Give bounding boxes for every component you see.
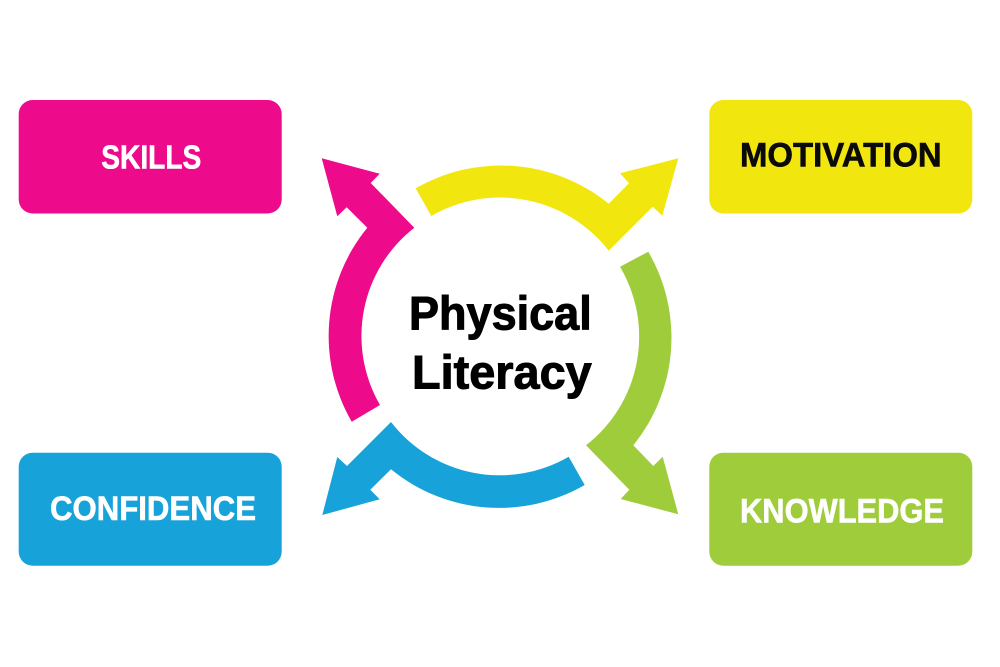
label: skills: SKILLS [101, 139, 201, 176]
panel: confidence [19, 453, 282, 566]
label: confidence: CONFIDENCE [50, 490, 256, 528]
arrow: blue toward confidence [322, 422, 585, 515]
title: physical literacy: Physical [409, 286, 592, 339]
panel: knowledge [709, 453, 972, 566]
label: knowledge: KNOWLEDGE [740, 492, 944, 530]
title: physical literacy: Literacy [412, 345, 592, 398]
label: motivation: MOTIVATION [740, 137, 942, 175]
arrow: yellow toward motivation [416, 158, 678, 251]
arrow: green toward knowledge [586, 252, 678, 514]
arrow: magenta toward skills [322, 158, 414, 422]
title: physical literacy [409, 286, 592, 398]
panel: skills [19, 100, 282, 214]
panel: motivation [709, 100, 972, 214]
